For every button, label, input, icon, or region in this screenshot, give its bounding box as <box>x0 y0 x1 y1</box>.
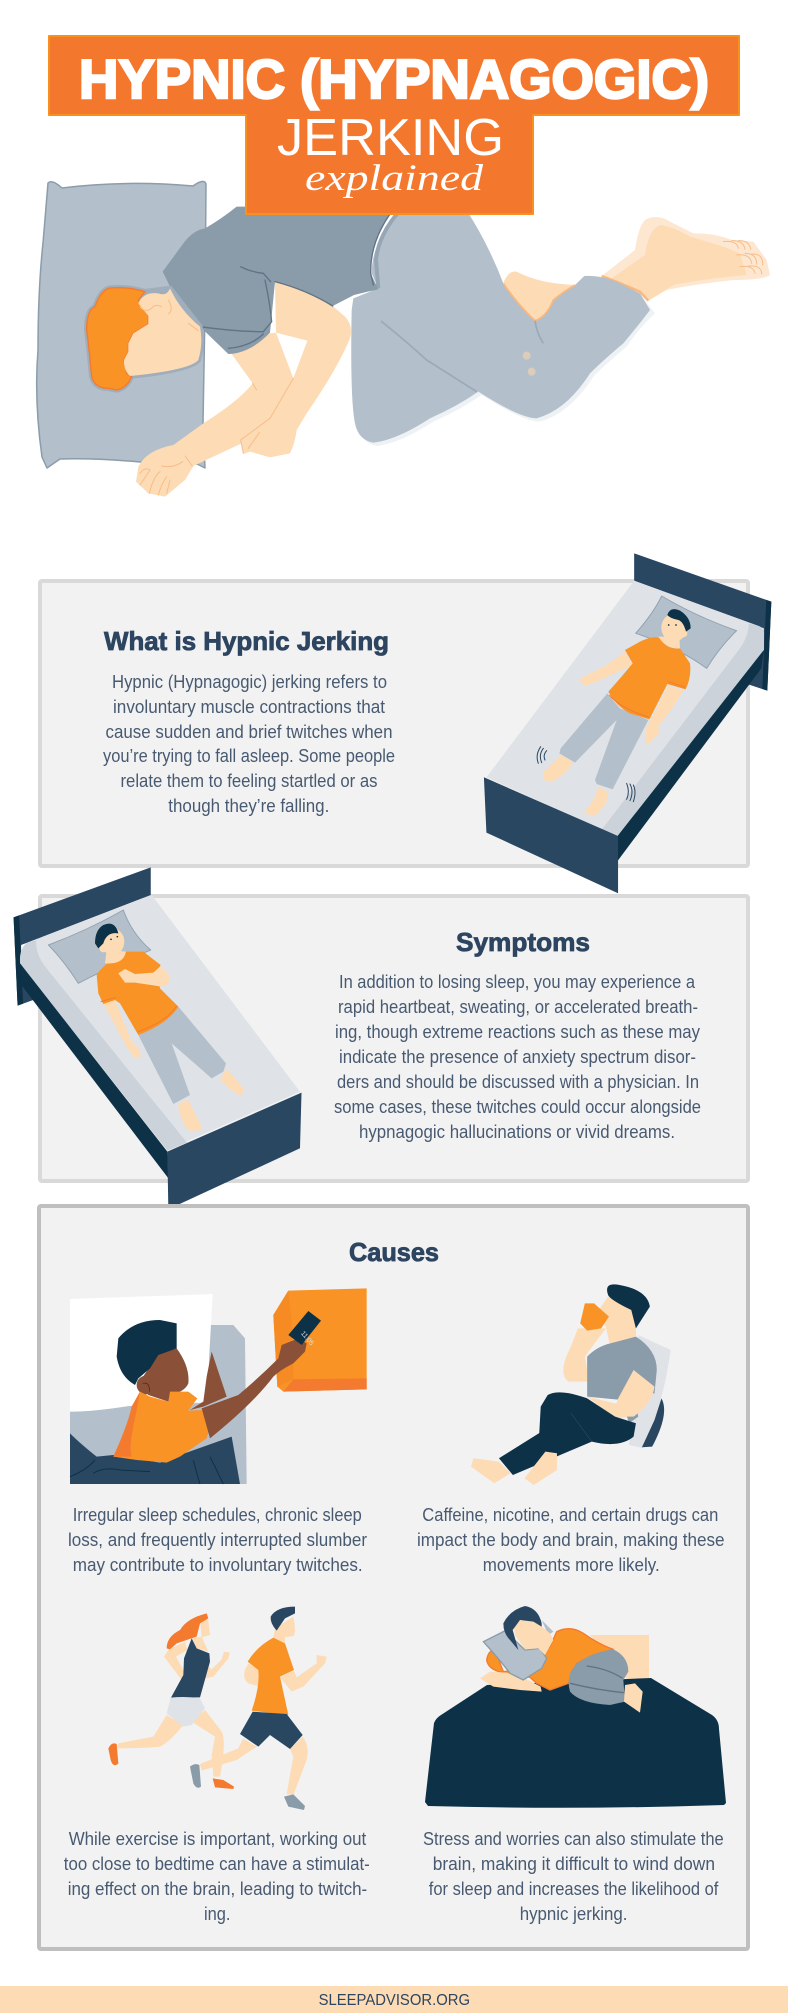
heading: causes: Causes <box>349 1237 439 1267</box>
shirt folds <box>200 215 389 348</box>
pants creases <box>381 321 543 392</box>
heading: What is Hypnic Jerking <box>104 626 389 656</box>
pillow <box>636 596 737 668</box>
illustration: two runners <box>108 1607 327 1810</box>
man runner <box>190 1607 327 1810</box>
head shadow <box>87 288 201 390</box>
text: symptoms <box>334 927 701 1142</box>
pants <box>351 207 650 443</box>
caption: exercise: too close to bedtime can have a stimulat- <box>64 1854 370 1874</box>
toes <box>723 241 763 274</box>
orange headboard <box>273 1288 367 1392</box>
pants <box>569 1649 628 1705</box>
shirt <box>97 952 178 1035</box>
body text: some cases, these twitches could occur alongside <box>334 1097 701 1117</box>
body text: ders and should be discussed with a physician. In <box>337 1072 699 1092</box>
cuff edge <box>602 276 648 301</box>
lower arm <box>480 1672 542 1692</box>
caption: caffeine: Caffeine, nicotine, and certain drugs can <box>422 1505 718 1525</box>
forearm across chest <box>118 966 170 987</box>
arm <box>563 1328 606 1382</box>
title line 3: explained <box>305 158 484 199</box>
forearm to hip <box>616 1370 654 1417</box>
body text: cause sudden and brief twitches when <box>106 722 392 742</box>
caption: stress <box>423 1829 724 1924</box>
panel: symptoms <box>40 896 748 1181</box>
body text <box>103 672 395 816</box>
foot outline accents <box>503 283 575 321</box>
sleeper <box>48 910 243 1131</box>
caption: exercise: ing. <box>204 1904 230 1924</box>
hero torso and head <box>87 207 393 497</box>
bed <box>425 1678 726 1808</box>
illustration: stressed person curled up <box>480 1606 643 1713</box>
ear lines <box>140 300 198 331</box>
arms <box>578 652 683 743</box>
shirt hem <box>101 997 177 1032</box>
hair <box>503 1606 542 1650</box>
shirt hem <box>609 682 685 717</box>
trousers <box>138 1007 226 1104</box>
body text: hypnagogic hallucinations or vivid dreams. <box>359 1122 675 1142</box>
back foot inner <box>612 225 747 301</box>
illustration: man drinking coffee <box>471 1284 671 1485</box>
body text: Hypnic (Hypnagogic) jerking refers to <box>112 672 387 692</box>
pants buttons <box>523 352 536 376</box>
person <box>113 1320 307 1463</box>
back leg <box>499 1413 592 1475</box>
body text: ing, though extreme reactions such as these may <box>335 1022 700 1042</box>
body text: relate them to feeling startled or as <box>120 771 378 791</box>
feet <box>471 1452 557 1485</box>
head <box>596 1297 636 1347</box>
pants folds <box>570 1666 624 1693</box>
body text <box>334 972 701 1142</box>
blanket <box>70 1433 240 1484</box>
neck and face <box>658 637 680 649</box>
pants shadow <box>353 288 655 446</box>
shirt <box>587 1337 657 1423</box>
hero legs and feet <box>351 207 770 446</box>
caption: stress: for sleep and increases the likelihood of <box>429 1879 719 1899</box>
belly <box>587 1393 643 1418</box>
body text: In addition to losing sleep, you may experience a <box>339 972 696 992</box>
hair <box>95 924 118 948</box>
caption: caffeine: impact the body and brain, making these <box>417 1530 724 1550</box>
eyes <box>111 937 117 939</box>
pillow <box>48 910 151 983</box>
panel: what is hypnic jerking <box>40 581 748 866</box>
footer text: SLEEPADVISOR.ORG <box>319 1992 470 2009</box>
back foot <box>602 217 770 301</box>
face <box>124 288 201 376</box>
phone <box>288 1311 321 1347</box>
body text: you’re trying to fall asleep. Some people <box>103 746 395 766</box>
blanket folds <box>70 1457 223 1484</box>
back cushion <box>629 1335 671 1448</box>
panel: causes <box>39 1206 748 1949</box>
hair <box>87 288 148 390</box>
title line 1: HYPNIC (HYPNAGOGIC) <box>79 48 709 110</box>
near arm <box>240 282 351 457</box>
caption: caffeine <box>417 1505 724 1575</box>
body text: though they’re falling. <box>168 796 329 816</box>
caption: irregular sleep: loss, and frequently interrupted slumber <box>68 1530 367 1550</box>
banner shape <box>49 36 739 214</box>
phone: 11:05 <box>299 1330 315 1347</box>
front foot <box>503 271 575 321</box>
shirt <box>608 637 690 719</box>
pillow <box>483 1631 547 1680</box>
hair <box>607 1284 650 1328</box>
footer bar <box>0 1986 788 2013</box>
feet <box>178 1068 243 1131</box>
sheet <box>70 1325 247 1484</box>
title banner <box>49 36 739 214</box>
waistband <box>376 207 403 288</box>
illustration: person in bed using phone <box>70 1288 367 1484</box>
cup <box>580 1303 609 1331</box>
caption: exercise <box>64 1829 370 1924</box>
caption: exercise: While exercise is important, working out <box>69 1829 366 1849</box>
woman runner <box>108 1613 234 1789</box>
title line 2: JERKING <box>277 109 504 167</box>
lower arm <box>103 1000 141 1058</box>
text: what is hypnic jerking <box>103 626 395 816</box>
hair <box>667 609 691 632</box>
shirt <box>487 1629 613 1690</box>
white pillow <box>70 1294 213 1412</box>
bed frame and mattress <box>14 867 301 1209</box>
illustration: bed with sleeper holding chest <box>14 867 301 1209</box>
pillow back <box>542 1620 553 1635</box>
vibration marks <box>537 747 635 802</box>
face and neck <box>513 1620 553 1655</box>
bed frame and mattress <box>484 553 771 893</box>
headboard block <box>590 1635 649 1679</box>
caption: stress: brain, making it difficult to wind down <box>433 1854 715 1874</box>
body text: rapid heartbeat, sweating, or accelerated breath- <box>338 997 698 1017</box>
illustration: bed for stressed sleeper <box>425 1635 726 1808</box>
eyes <box>669 622 676 627</box>
body text: indicate the presence of anxiety spectrum disor- <box>339 1047 696 1067</box>
caption: irregular sleep: Irregular sleep schedules, chronic sleep <box>73 1505 362 1525</box>
dark seat back <box>642 1398 664 1447</box>
arm and hand lines <box>140 378 293 495</box>
body text: involuntary muscle contractions that <box>113 697 385 717</box>
sleeper <box>537 596 737 816</box>
caption: stress: Stress and worries can also stimulate the <box>423 1829 724 1849</box>
caption: irregular sleep <box>68 1505 367 1575</box>
feet <box>543 755 607 816</box>
caption: stress: hypnic jerking. <box>520 1904 628 1924</box>
trousers <box>559 693 648 789</box>
far arm <box>136 333 293 497</box>
front leg <box>538 1392 636 1452</box>
illustration: bed with twitching sleeper <box>484 553 771 893</box>
feet <box>624 1683 643 1713</box>
shirt <box>163 207 393 354</box>
caption: irregular sleep: may contribute to involuntary twitches. <box>73 1555 363 1575</box>
caption: caffeine: movements more likely. <box>483 1555 660 1575</box>
hero pillow <box>37 181 206 468</box>
caption: exercise: ing effect on the brain, leading to twitch- <box>68 1879 367 1899</box>
neck and face <box>105 950 126 964</box>
heading: Symptoms <box>456 927 590 957</box>
